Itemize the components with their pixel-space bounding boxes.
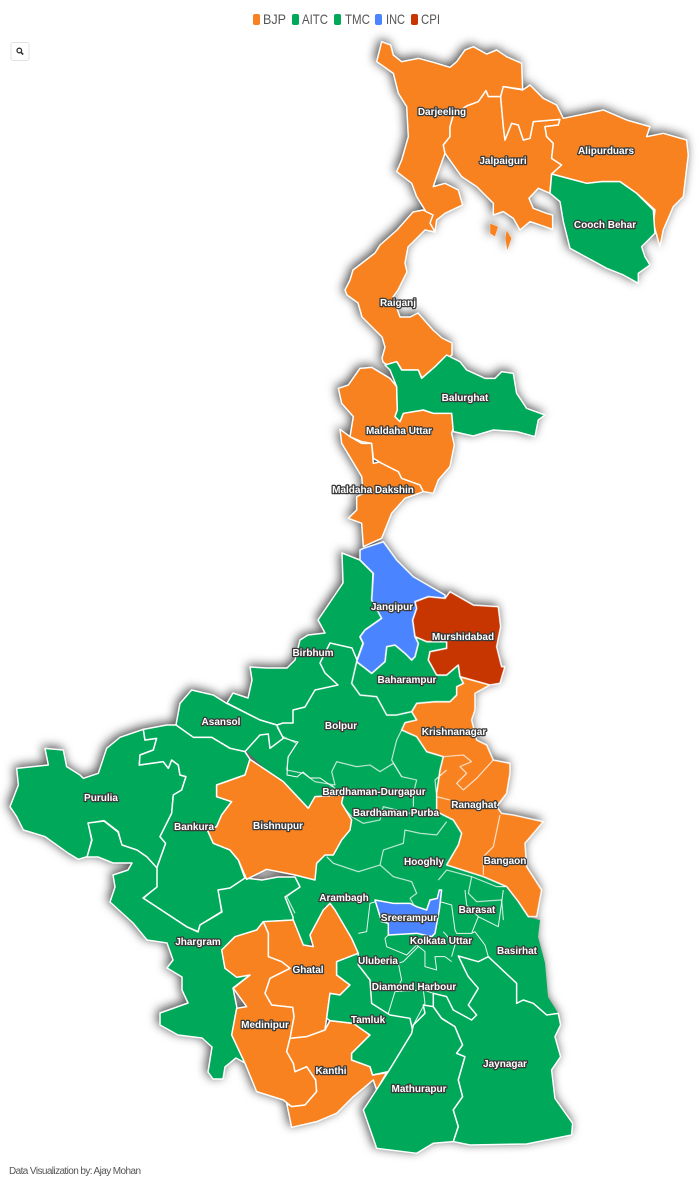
constituency labels: Kanthi (315, 1066, 347, 1077)
constituency labels: Birbhum (292, 648, 334, 659)
constituency: Jangipur (357, 542, 445, 673)
constituency labels: Darjeeling (418, 107, 466, 118)
constituency labels: Basirhat (497, 946, 538, 957)
constituency: Jhargram (87, 821, 300, 1079)
legend: TMC (345, 11, 370, 27)
constituency: Ghatal (263, 903, 358, 1038)
constituency labels: Arambagh (319, 893, 369, 904)
constituency: Balurghat (385, 355, 545, 437)
boundary lines: south (358, 890, 503, 1025)
constituency: Kanthi (287, 1021, 387, 1127)
constituency: Raiganj (345, 210, 452, 378)
constituency labels: Asansol (202, 717, 241, 728)
constituency labels: Cooch Behar (574, 220, 636, 231)
constituency: Krishnanagar, Ranaghat, Bangaon (402, 677, 543, 917)
constituency: Bankura (139, 725, 250, 932)
constituency: Murshidabad (413, 592, 505, 685)
constituency: Purulia (10, 729, 186, 868)
constituency labels: Ranaghat (451, 800, 497, 811)
constituency: Maldaha Uttar (338, 367, 455, 493)
constituency labels: Sreerampur (381, 913, 437, 924)
legend: CPI (421, 11, 440, 27)
constituency labels: Jhargram (175, 937, 221, 948)
constituency labels: Balurghat (442, 393, 489, 404)
islands (490, 223, 512, 251)
constituency labels: Krishnanagar (422, 727, 486, 738)
boundary lines: central-north (280, 730, 507, 920)
constituency labels (84, 107, 636, 1095)
constituency: Alipurduars (501, 85, 688, 247)
constituency labels: Maldaha Dakshin (332, 485, 414, 496)
constituency: Mathurapur (363, 1005, 465, 1153)
constituency labels: Hooghly (404, 857, 444, 868)
constituency labels: Ghatal (292, 965, 324, 976)
constituency: Birbhum (227, 553, 382, 725)
constituency: Baharampur (352, 637, 463, 715)
constituency: Darjeeling (377, 42, 523, 232)
icon: zoom button (11, 42, 29, 60)
legend: AITC (302, 11, 328, 27)
constituency labels: Bardhaman-Durgapur (322, 787, 426, 798)
constituency labels: Alipurduars (578, 146, 634, 157)
legend (253, 11, 440, 27)
constituency labels: Bishnupur (253, 821, 303, 832)
constituency labels: Diamond Harbour (372, 982, 456, 993)
constituency: Bishnupur (207, 759, 352, 880)
constituency: Tamluk (327, 953, 413, 1075)
constituency labels: Medinipur (241, 1020, 289, 1031)
constituency labels: Mathurapur (392, 1084, 447, 1095)
central green constituencies fill (240, 635, 561, 1050)
legend: BJP (263, 11, 286, 27)
constituency labels: Murshidabad (432, 632, 494, 643)
constituency: Medinipur (222, 922, 317, 1107)
constituency labels: Jalpaiguri (479, 156, 527, 167)
constituency labels: Bardhaman Purba (353, 808, 440, 819)
legend: INC (386, 11, 405, 27)
constituency: Asansol (176, 690, 283, 752)
constituency: Cooch Behar (550, 174, 655, 283)
constituency: Jaynagar (433, 956, 573, 1145)
constituency labels: Bolpur (325, 721, 357, 732)
constituency: Jalpaiguri (443, 91, 562, 230)
constituency labels: Tamluk (351, 1015, 386, 1026)
constituency: Sreerampur (375, 890, 442, 937)
constituency labels: Kolkata Uttar (410, 936, 472, 947)
constituency labels: Uluberia (358, 956, 398, 967)
constituency labels: Purulia (84, 793, 118, 804)
constituency labels: Bangaon (484, 856, 526, 867)
constituency labels: Raiganj (380, 298, 416, 309)
constituency labels: Bankura (174, 822, 214, 833)
footer credit: Data Visualization by: Ajay Mohan (9, 1166, 141, 1177)
constituency labels: Jangipur (371, 602, 413, 613)
central-north constituencies (280, 542, 543, 920)
north districts (377, 42, 688, 251)
boundary lines: Bolpur west (277, 727, 333, 787)
constituency labels: Barasat (459, 905, 496, 916)
constituency labels: Baharampur (378, 675, 437, 686)
west constituencies (10, 690, 283, 932)
constituency labels: Jaynagar (483, 1059, 527, 1070)
south constituencies (222, 890, 573, 1153)
constituency: Maldaha Dakshin (340, 429, 423, 547)
constituency labels: Maldaha Uttar (366, 426, 432, 437)
